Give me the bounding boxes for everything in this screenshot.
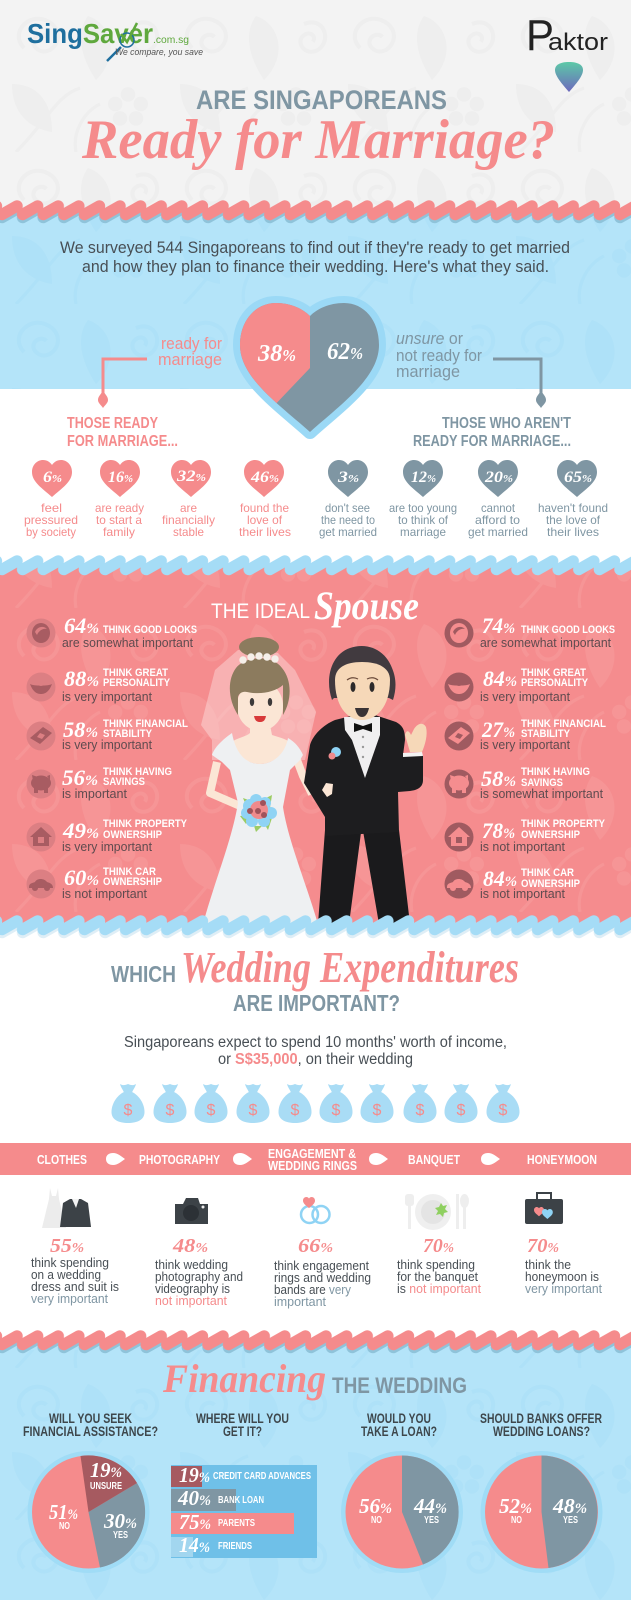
stat: 65% haven't found love: haven't found <box>538 501 608 515</box>
pie chart: would you take a loan: NO <box>371 1515 382 1526</box>
row: right great personality: 84% <box>483 666 517 691</box>
row: right property: 78% <box>482 818 515 843</box>
column: photography: photography and <box>155 1270 243 1284</box>
column: rings: 66% <box>298 1235 333 1257</box>
heading: would you take a loan <box>361 1411 437 1439</box>
heading: the ideal spouse <box>211 583 419 628</box>
stat: 65% haven't found love: their lives <box>547 525 599 539</box>
heading: the ideal spouse: Spouse <box>314 583 419 628</box>
heading: financing the wedding: Financing <box>162 1356 326 1401</box>
row: right car: THINK CAR <box>521 867 574 879</box>
heading: those who aren't <box>413 415 571 450</box>
row: left car: is not important <box>62 886 147 901</box>
logo: Paktor: P <box>526 11 554 60</box>
panel: ideal spouse background <box>0 565 631 925</box>
row: right good looks <box>444 613 615 650</box>
row: left financial stability: THINK FINANCIAL <box>103 718 188 730</box>
logo: Paktor: aktor <box>548 29 608 56</box>
stat: 6% feel pressured: pressured <box>24 513 78 527</box>
heading: those who aren't: READY FOR MARRIAGE... <box>413 433 571 450</box>
row: left financial stability: is very important <box>62 737 152 752</box>
row: left car: OWNERSHIP <box>103 876 162 888</box>
row: right savings: THINK HAVING <box>521 766 590 778</box>
stat: 3% no need <box>319 460 377 539</box>
pie chart: should banks offer wedding loans: 48% <box>552 1494 587 1518</box>
row: left savings: 56% <box>62 765 98 790</box>
heading: which wedding expenditures are important: Wedding Expenditures <box>181 943 519 992</box>
title: ARE SINGAPOREANS <box>196 85 447 115</box>
pie chart: financial assistance <box>28 1451 150 1573</box>
stat: 3% no need: the need to <box>321 513 375 527</box>
column: honeymoon <box>525 1193 603 1296</box>
icons: ten money bags: $ <box>373 1102 382 1119</box>
stat: 46% found the love: their lives <box>239 525 291 539</box>
stat: 46% found the love: found the <box>240 501 289 515</box>
row: left property: THINK PROPERTY <box>103 818 188 830</box>
text: S$35,000 expected spend: or S$35,000, on their wedding <box>218 1051 413 1068</box>
stat: 3% no need: 3% <box>337 469 359 486</box>
column: honeymoon: honeymoon is <box>525 1270 599 1284</box>
row: right property: is not important <box>480 839 565 854</box>
stat: 12% too young: are too young <box>389 501 457 515</box>
column: photography: 48% <box>172 1235 208 1257</box>
stat: 16% start a family: to start a <box>96 513 142 527</box>
pie chart: should banks offer wedding loans: NO <box>511 1515 522 1526</box>
row: left great personality: PERSONALITY <box>103 677 171 689</box>
row: right great personality <box>444 666 589 704</box>
row: right car: OWNERSHIP <box>521 878 580 890</box>
row: left great personality: is very important <box>62 689 152 704</box>
row: right car: 84% <box>483 866 517 891</box>
bar chart: source of funds: PARENTS <box>218 1518 255 1529</box>
column: honeymoon: think the <box>525 1258 571 1272</box>
icons: ten money bags: $ <box>416 1102 425 1119</box>
column: honeymoon: 70% <box>527 1235 559 1257</box>
stat: 20% cannot afford: get married <box>468 525 528 539</box>
bar chart: source of funds <box>171 1463 317 1558</box>
arrow: ready connector <box>98 359 147 408</box>
row: right savings <box>444 766 603 801</box>
row: right car <box>444 866 580 901</box>
stat: 46% found the love <box>239 460 291 539</box>
stat: 3% no need: don't see <box>325 501 370 515</box>
stat: 6% feel pressured: feel <box>41 501 62 515</box>
bar chart: source of funds: 75% <box>179 1510 211 1534</box>
row: left great personality <box>26 666 171 704</box>
stat: 20% cannot afford <box>468 460 528 539</box>
row: left savings <box>26 765 172 801</box>
row: left savings: THINK HAVING <box>103 766 172 778</box>
logo: Paktor <box>526 11 608 92</box>
icons: ten money bags: $ <box>124 1102 133 1119</box>
column: photography: not important <box>155 1294 228 1308</box>
label: ready for marriage: marriage <box>158 350 222 369</box>
arrow: not ready connector <box>493 359 546 408</box>
title: Ready for Marriage? <box>81 109 555 171</box>
stat: 32% financially stable <box>162 460 215 539</box>
pie chart: should banks offer wedding loans <box>480 1451 602 1573</box>
row: left financial stability: STABILITY <box>103 728 153 740</box>
row: right car: is not important <box>480 886 565 901</box>
panel: header background <box>0 0 631 212</box>
row: right savings: 58% <box>481 766 516 791</box>
panel: financing background <box>0 1340 631 1600</box>
row: left good looks <box>26 613 197 650</box>
heading: where will you get it <box>196 1411 289 1439</box>
stat: 32% financially stable: are <box>180 501 197 515</box>
pie chart: financial assistance: UNSURE <box>90 1481 122 1492</box>
row: right great personality: THINK GREAT <box>521 667 586 679</box>
column: banquet: think spending <box>397 1258 475 1272</box>
column: rings: bands are very <box>274 1283 352 1297</box>
logo: SingSaver: We compare, you save <box>115 47 203 57</box>
wave divider: coral <box>0 200 631 224</box>
heart chart: 38% ready, 62% unsure or not ready: 62% <box>327 339 363 365</box>
pie chart: financial assistance: YES <box>113 1530 128 1541</box>
heart chart: 38% ready, 62% unsure or not ready: 38% <box>257 341 296 367</box>
row: left property: OWNERSHIP <box>103 829 162 841</box>
row: left property: 49% <box>62 818 99 843</box>
row: left car: THINK CAR <box>103 866 156 878</box>
column: rings: think engagement <box>274 1259 369 1273</box>
stat: 46% found the love: love of <box>247 513 283 527</box>
row: left savings: is important <box>62 786 127 801</box>
wave divider: blue top of coral <box>0 555 631 576</box>
row: left good looks: 64% <box>64 613 99 638</box>
wave divider: coral above financing <box>0 1330 631 1354</box>
heading: would you take a loan: WOULD YOU <box>367 1411 431 1426</box>
pie chart: would you take a loan: YES <box>424 1515 439 1526</box>
icons: ten money bags <box>112 1084 520 1123</box>
pie chart: financial assistance: 19% <box>90 1458 122 1482</box>
intro text: and how they plan to finance their wedding. Here's what they said. <box>82 258 549 276</box>
row: left good looks: are somewhat important <box>62 635 193 650</box>
heading: will you seek financial assistance: WILL YOU SEEK <box>49 1411 132 1426</box>
stat: 20% cannot afford: cannot <box>481 501 516 515</box>
pie chart: would you take a loan: 44% <box>413 1494 447 1518</box>
column: rings: rings and wedding <box>274 1271 371 1285</box>
bar chart: source of funds: BANK LOAN <box>218 1495 264 1506</box>
stat: 65% haven't found love <box>538 460 608 539</box>
logo: SingSaver: .com.sg <box>153 35 189 46</box>
intro text: We surveyed 544 Singaporeans to find out if they're ready to get married <box>60 239 570 257</box>
row: right financial stability: THINK FINANCIAL <box>521 718 606 730</box>
label: ready for marriage <box>158 334 222 369</box>
row: right property: THINK PROPERTY <box>521 818 606 830</box>
row: left car <box>26 865 162 901</box>
wave divider: blue bottom of coral <box>0 915 631 939</box>
logo: SingSaver: SingSaver <box>27 18 153 49</box>
stat: 16% start a family <box>95 460 144 539</box>
bar chart: source of funds: 14% <box>179 1533 210 1557</box>
heading: financing the wedding: THE WEDDING <box>332 1373 467 1398</box>
column: clothes: think spending <box>31 1256 109 1270</box>
row: right financial stability: is very important <box>480 737 570 752</box>
stat: 65% haven't found love: 65% <box>564 469 592 486</box>
column: rings: important <box>274 1295 327 1309</box>
heading: which wedding expenditures are important <box>111 943 519 1016</box>
row: right great personality: PERSONALITY <box>521 677 589 689</box>
icons: ten money bags: $ <box>166 1102 175 1119</box>
heading: will you seek financial assistance <box>23 1411 158 1439</box>
heading: which wedding expenditures are important: ARE IMPORTANT? <box>233 990 400 1016</box>
row: right great personality: is very important <box>480 689 570 704</box>
row: left car: 60% <box>64 865 99 890</box>
pie chart: would you take a loan: 56% <box>359 1494 392 1518</box>
panel: white results background <box>0 389 631 565</box>
pie chart: should banks offer wedding loans: YES <box>563 1515 578 1526</box>
banner: expenditure categories: BANQUET <box>408 1152 460 1167</box>
column: banquet: is not important <box>397 1282 482 1296</box>
column: clothes: very important <box>31 1292 109 1306</box>
row: right financial stability: STABILITY <box>521 728 571 740</box>
heading: will you seek financial assistance: FINANCIAL ASSISTANCE? <box>23 1424 158 1439</box>
illustration: groom <box>304 646 427 924</box>
stat: 12% too young: marriage <box>400 525 446 539</box>
column: banquet: for the banquet <box>397 1270 478 1284</box>
banner: expenditure categories: CLOTHES <box>37 1152 87 1167</box>
row: left savings: SAVINGS <box>103 776 145 788</box>
bar chart: source of funds: CREDIT CARD ADVANCES <box>213 1471 311 1482</box>
heading: would you take a loan: TAKE A LOAN? <box>361 1424 437 1439</box>
pie chart: financial assistance: 51% <box>49 1500 78 1524</box>
row: right financial stability: 27% <box>481 717 515 742</box>
icons: ten money bags: $ <box>332 1102 341 1119</box>
row: left great personality: 88% <box>64 666 99 691</box>
column: photography: think wedding <box>155 1258 228 1272</box>
stat: 6% feel pressured: 6% <box>43 469 62 486</box>
stat: 12% too young: to think of <box>398 513 449 527</box>
pie chart: should banks offer wedding loans: 52% <box>499 1494 532 1518</box>
heading: those ready: FOR MARRIAGE... <box>67 433 178 450</box>
row: right savings: is somewhat important <box>480 786 603 801</box>
row: right property: OWNERSHIP <box>521 829 580 841</box>
stat: 6% feel pressured <box>24 460 78 539</box>
row: left good looks: THINK GOOD LOOKS <box>103 624 197 636</box>
stat: 46% found the love: 46% <box>250 469 279 486</box>
logo: SingSaver <box>27 18 203 61</box>
pie chart: financial assistance: 30% <box>103 1509 137 1533</box>
icons: ten money bags: $ <box>457 1102 466 1119</box>
column: photography <box>155 1198 243 1308</box>
icons: ten money bags: $ <box>249 1102 258 1119</box>
stat: 12% too young <box>389 460 457 539</box>
stat: 65% haven't found love: the love of <box>546 513 601 527</box>
row: left property: is very important <box>62 839 152 854</box>
heading: those ready <box>67 415 178 450</box>
stat: 16% start a family: family <box>103 525 135 539</box>
column: honeymoon: very important <box>525 1282 603 1296</box>
column: clothes <box>31 1188 119 1306</box>
stat: 3% no need: get married <box>319 525 377 539</box>
stat: 32% financially stable: 32% <box>176 468 206 485</box>
icons: ten money bags: $ <box>207 1102 216 1119</box>
heading: should banks offer wedding loans: WEDDING LOANS? <box>493 1424 590 1439</box>
banner: expenditure categories: WEDDING RINGS <box>268 1158 357 1173</box>
row: right good looks: 74% <box>482 613 515 638</box>
banner: expenditure categories: ENGAGEMENT & <box>268 1146 356 1161</box>
banner: expenditure categories: HONEYMOON <box>527 1152 597 1167</box>
stat: 20% cannot afford: 20% <box>484 469 513 486</box>
row: right savings: SAVINGS <box>521 777 563 789</box>
stat: 16% start a family: are ready <box>95 501 144 515</box>
heart chart: 38% ready, 62% unsure or not ready <box>240 303 379 432</box>
heading: where will you get it: GET IT? <box>223 1424 262 1439</box>
pie chart: would you take a loan <box>341 1451 463 1573</box>
label: unsure or not ready <box>396 329 482 381</box>
panel: survey background <box>0 210 631 389</box>
panel: wedding expenditures background <box>0 925 631 1340</box>
bar chart: source of funds: FRIENDS <box>218 1541 252 1552</box>
banner: expenditure categories: PHOTOGRAPHY <box>139 1152 220 1167</box>
stat: 32% financially stable: stable <box>173 525 204 539</box>
heading: financing the wedding <box>162 1356 467 1401</box>
icons: ten money bags: $ <box>499 1102 508 1119</box>
row: left financial stability <box>26 717 188 752</box>
label: unsure or not ready: marriage <box>396 362 460 381</box>
column: clothes: 55% <box>50 1235 84 1257</box>
stat: 16% start a family: 16% <box>108 469 133 486</box>
column: banquet <box>397 1194 482 1296</box>
stat: 12% too young: 12% <box>411 469 436 486</box>
bar chart: source of funds: 19% <box>179 1463 210 1487</box>
row: left financial stability: 58% <box>63 717 98 742</box>
row: right property <box>444 818 606 854</box>
stat: 32% financially stable: financially <box>162 513 215 527</box>
bar chart: source of funds: 40% <box>177 1486 211 1510</box>
label: unsure or not ready: unsure or <box>396 329 463 348</box>
row: right financial stability <box>444 717 606 752</box>
illustration: bride <box>201 637 318 924</box>
column: rings <box>274 1197 371 1309</box>
column: banquet: 70% <box>423 1235 454 1257</box>
heading: should banks offer wedding loans <box>480 1411 602 1439</box>
column: photography: videography is <box>155 1282 230 1296</box>
text: S$35,000 expected spend: Singaporeans expect to spend 10 months' worth of income, <box>124 1034 507 1051</box>
heading: where will you get it: WHERE WILL YOU <box>196 1411 289 1426</box>
text: S$35,000 expected spend <box>124 1034 507 1068</box>
heading: which wedding expenditures are important: WHICH <box>111 961 176 987</box>
row: left property <box>26 818 188 854</box>
column: clothes: on a wedding <box>31 1268 101 1282</box>
heading: those ready: THOSE READY <box>67 415 159 432</box>
stat: 6% feel pressured: by society <box>26 525 76 539</box>
label: unsure or not ready: not ready for <box>396 346 482 365</box>
row: right good looks: are somewhat important <box>480 635 611 650</box>
icons: ten money bags: $ <box>291 1102 300 1119</box>
intro text <box>60 239 570 276</box>
label: ready for marriage: ready for <box>161 334 222 353</box>
heading: the ideal spouse: THE IDEAL <box>211 600 310 623</box>
banner: expenditure categories <box>0 1143 631 1175</box>
column: clothes: dress and suit is <box>31 1280 119 1294</box>
pie chart: financial assistance: NO <box>59 1521 70 1532</box>
stat: 20% cannot afford: afford to <box>475 513 520 527</box>
row: left great personality: THINK GREAT <box>103 667 168 679</box>
heading: those who aren't: THOSE WHO AREN'T <box>442 415 571 432</box>
row: right good looks: THINK GOOD LOOKS <box>521 624 615 636</box>
